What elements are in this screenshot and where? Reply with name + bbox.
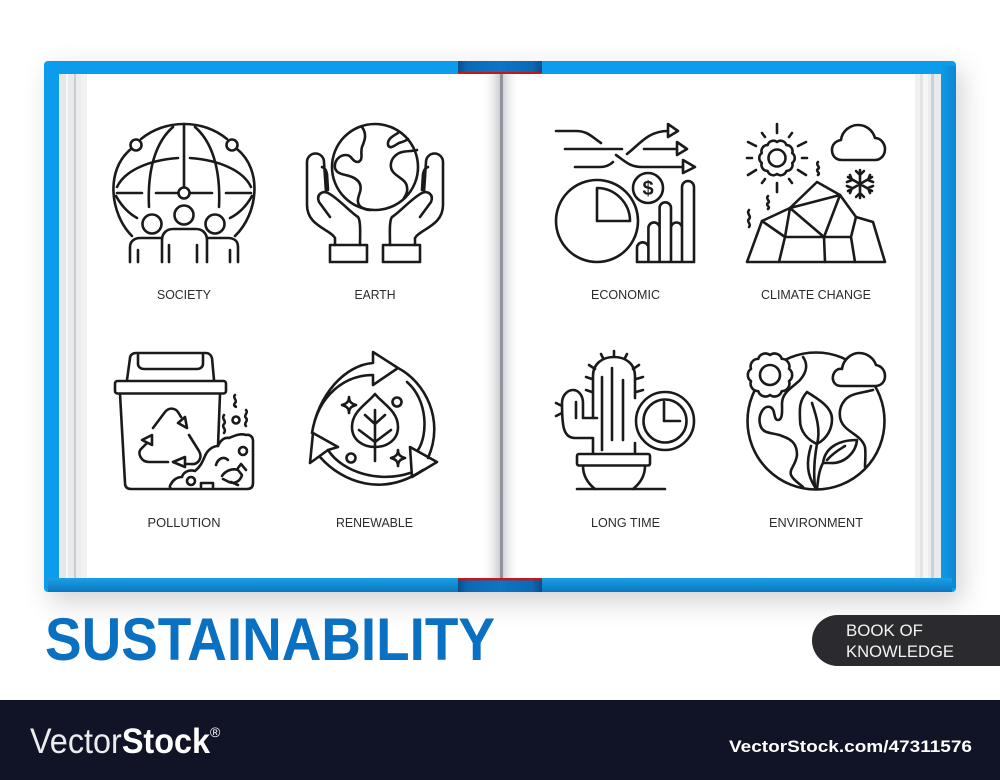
footer bar [0,700,1000,780]
badge: book of knowledge: KNOWLEDGE [846,642,954,661]
logo: VectorStock: VectorStock [30,722,210,761]
label: society: SOCIETY [157,288,212,302]
heat squiggles [748,162,819,227]
book [44,61,962,602]
icon: earth in hands [307,124,443,262]
spine top band [458,61,542,74]
leaves [800,392,857,489]
icon: climate change [747,124,885,262]
label: economic: ECONOMIC [591,288,660,302]
iceberg [747,182,885,262]
icon: environment [748,352,885,490]
label: earth: EARTH [354,288,396,302]
pages [59,74,941,578]
cloud [833,353,885,386]
footer url: VectorStock.com/47311576 [729,737,972,756]
sun [747,124,807,192]
icon: society [113,124,254,262]
title: SUSTAINABILITY [45,606,495,673]
registered mark: ® [210,724,221,740]
label: renewable: RENEWABLE [336,516,413,530]
label: environment: ENVIRONMENT [769,516,863,530]
badge: book of knowledge: BOOK OF [846,621,923,640]
recycling arrows [139,409,200,467]
icon: long time [556,351,694,489]
icon: renewable [310,352,437,485]
book cover [44,61,956,592]
snowflake [847,170,873,198]
right hand [383,154,443,262]
badge: book of knowledge [812,615,1000,666]
leaf [352,394,398,461]
clock [636,392,694,450]
label: long time: LONG TIME [591,516,660,530]
cloud [832,125,885,160]
icon: pollution [115,353,253,489]
circular arrows [310,352,437,485]
gear [748,353,792,397]
spine bottom band [458,578,542,592]
label: pollution: POLLUTION [148,516,220,530]
icon: economic [556,124,695,262]
left hand [307,154,367,262]
dollar sign: $ [642,178,654,200]
label: climate change: CLIMATE CHANGE [761,288,871,302]
